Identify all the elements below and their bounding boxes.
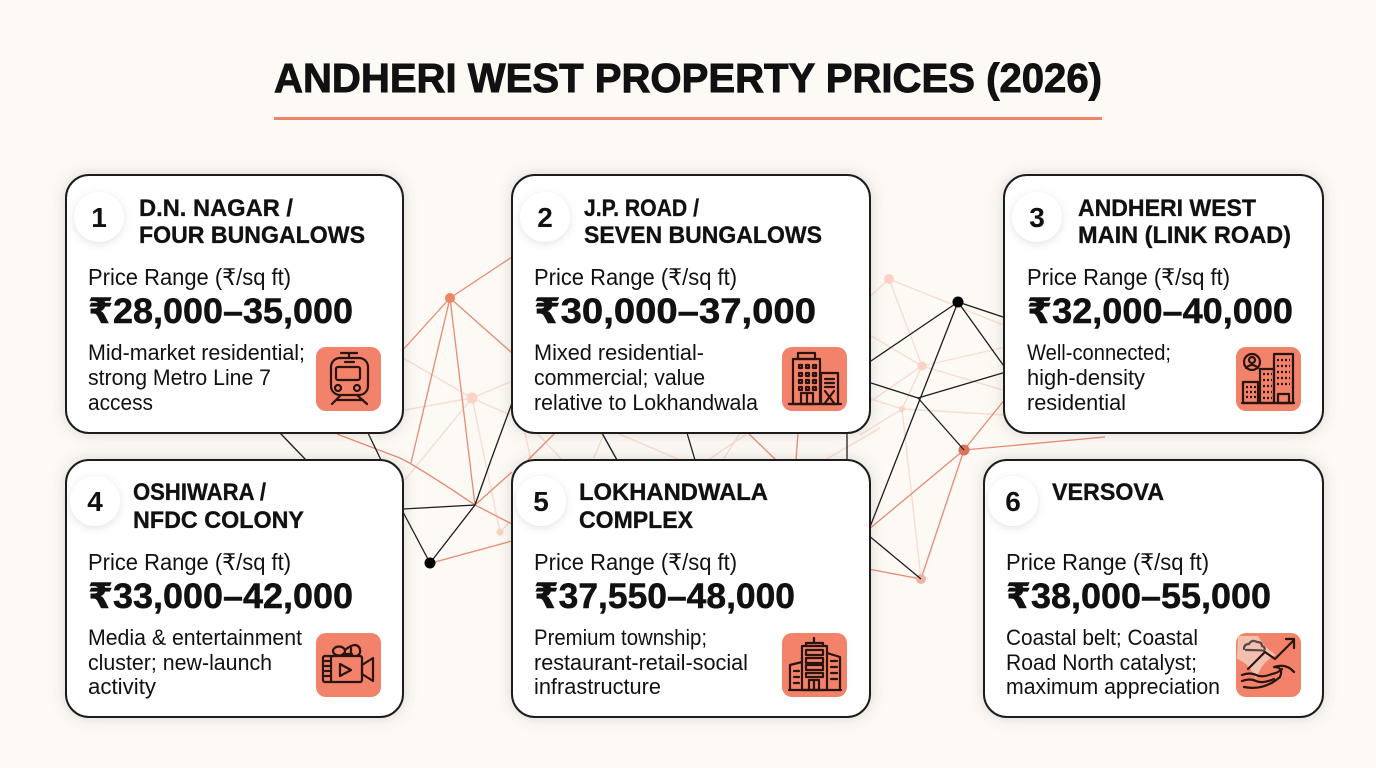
description: maximum appreciation xyxy=(1006,674,1220,699)
number badge 1 xyxy=(74,192,124,242)
description xyxy=(1006,625,1220,699)
description: infrastructure xyxy=(534,674,661,699)
heading: SEVEN BUNGALOWS xyxy=(584,222,822,249)
number badge 3: 3 xyxy=(1029,202,1045,233)
heading: NFDC COLONY xyxy=(133,507,304,534)
price label: Price Range (₹/sq ft) xyxy=(1027,264,1230,290)
heading xyxy=(139,195,365,249)
heading xyxy=(133,479,304,534)
description: Mixed residential- xyxy=(534,340,704,365)
heading: VERSOVA xyxy=(1052,479,1164,506)
number badge 3 xyxy=(1012,192,1062,242)
heading: OSHIWARA / xyxy=(133,479,266,506)
icon: premium tower complex xyxy=(782,633,847,697)
price value: ₹28,000–35,000 xyxy=(88,292,353,331)
price value: ₹38,000–55,000 xyxy=(1006,577,1271,616)
heading: ANDHERI WEST xyxy=(1078,195,1256,222)
description: Premium township; xyxy=(534,625,707,650)
price value: ₹33,000–42,000 xyxy=(88,577,353,616)
panel: J.P. Road / Seven Bungalows xyxy=(512,175,870,433)
heading: D.N. NAGAR / xyxy=(139,195,293,222)
heading: MAIN (LINK ROAD) xyxy=(1078,222,1291,249)
title: ANDHERI WEST PROPERTY PRICES (2026) xyxy=(274,55,1102,101)
panel: Lokhandwala Complex xyxy=(512,460,870,717)
description: cluster; new-launch xyxy=(88,650,272,675)
heading: FOUR BUNGALOWS xyxy=(139,222,365,249)
description: Media & entertainment xyxy=(88,625,303,650)
icon: mixed-use buildings xyxy=(782,347,847,411)
icon: metro train xyxy=(316,347,381,411)
icon: high-density towers with resident xyxy=(1236,347,1301,411)
panel: Versova xyxy=(984,460,1323,717)
heading: LOKHANDWALA xyxy=(579,479,768,506)
price value: ₹32,000–40,000 xyxy=(1027,292,1293,331)
price label: Price Range (₹/sq ft) xyxy=(88,264,291,290)
number badge 6 xyxy=(988,476,1038,526)
heading xyxy=(584,195,822,249)
heading xyxy=(579,479,768,534)
heading: COMPLEX xyxy=(579,507,694,534)
panel: Andheri West Main (Link Road) xyxy=(1004,175,1323,433)
price label: Price Range (₹/sq ft) xyxy=(534,549,737,575)
price label: Price Range (₹/sq ft) xyxy=(534,264,737,290)
description xyxy=(1027,340,1171,415)
number badge 2: 2 xyxy=(537,202,553,233)
description xyxy=(534,625,748,699)
icon: coastline with rising arrow xyxy=(1236,633,1301,697)
price label: Price Range (₹/sq ft) xyxy=(88,549,291,575)
number badge 4 xyxy=(70,476,120,526)
heading: J.P. ROAD / xyxy=(584,195,699,222)
description xyxy=(88,340,305,415)
number badge 1: 1 xyxy=(91,202,107,233)
description: commercial; value xyxy=(534,365,705,390)
description xyxy=(88,625,303,699)
number badge 6: 6 xyxy=(1005,486,1021,517)
description: residential xyxy=(1027,390,1126,415)
price label: Price Range (₹/sq ft) xyxy=(1006,549,1209,575)
title underline xyxy=(274,117,1102,120)
number badge 5: 5 xyxy=(533,486,549,517)
number badge 2 xyxy=(520,192,570,242)
description: access xyxy=(88,390,153,415)
description: activity xyxy=(88,674,157,699)
description: Mid-market residential; xyxy=(88,340,305,365)
heading xyxy=(1078,195,1291,249)
description: high-density xyxy=(1027,365,1146,390)
icon: film camera xyxy=(316,633,381,697)
description: strong Metro Line 7 xyxy=(88,365,271,390)
network background graphic xyxy=(280,257,1105,584)
description: relative to Lokhandwala xyxy=(534,390,758,415)
description: Well-connected; xyxy=(1027,340,1171,365)
number badge 5 xyxy=(516,476,566,526)
description xyxy=(534,340,758,415)
description: Coastal belt; Coastal xyxy=(1006,625,1198,650)
panel: Oshiwara / NFDC Colony xyxy=(66,460,403,717)
price value: ₹37,550–48,000 xyxy=(534,577,795,616)
description: Road North catalyst; xyxy=(1006,650,1197,675)
price value: ₹30,000–37,000 xyxy=(534,292,816,331)
description: restaurant-retail-social xyxy=(534,650,748,675)
number badge 4: 4 xyxy=(87,486,103,517)
panel: D.N. Nagar / Four Bungalows xyxy=(66,175,403,433)
